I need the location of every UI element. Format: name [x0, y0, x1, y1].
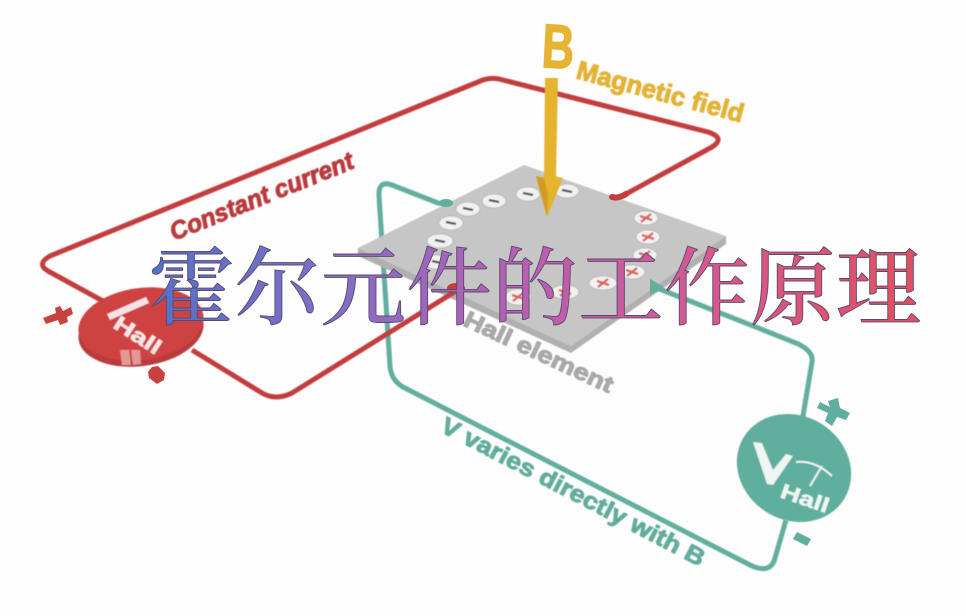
V letter [753, 442, 793, 485]
current source disc [74, 280, 208, 374]
voltmeter plus sign [817, 398, 850, 426]
label: Constant current: Constant current [166, 147, 359, 247]
voltmeter minus sign [793, 532, 811, 546]
title: 霍尔元件的工作原理 [149, 221, 921, 343]
voltmeter disc [716, 393, 872, 543]
teal wire, right run with contact [439, 199, 812, 422]
negative charge tokens [425, 184, 579, 269]
teal voltage wire, left and bottom run [379, 184, 786, 569]
Hall text on disc: Hall [109, 312, 165, 360]
meter needle [796, 462, 832, 486]
label: Magnetic field: Magnetic field [573, 55, 747, 128]
Hall text on meter: Hall [777, 480, 832, 518]
label: Hall element: Hall element [460, 306, 618, 398]
magnetic field arrow [536, 78, 563, 217]
positive charge tokens [505, 211, 660, 305]
label: B: B [540, 12, 576, 82]
red wire contact and terminals on plate [192, 194, 626, 397]
pale bars [120, 350, 141, 365]
Hall element plate [358, 165, 726, 353]
I symbol [107, 297, 149, 320]
current source minus sign [148, 366, 165, 384]
label: V varies directly with B: V varies directly with B [436, 412, 709, 572]
current source plus sign [43, 306, 73, 325]
red current wire, top run [42, 78, 718, 306]
